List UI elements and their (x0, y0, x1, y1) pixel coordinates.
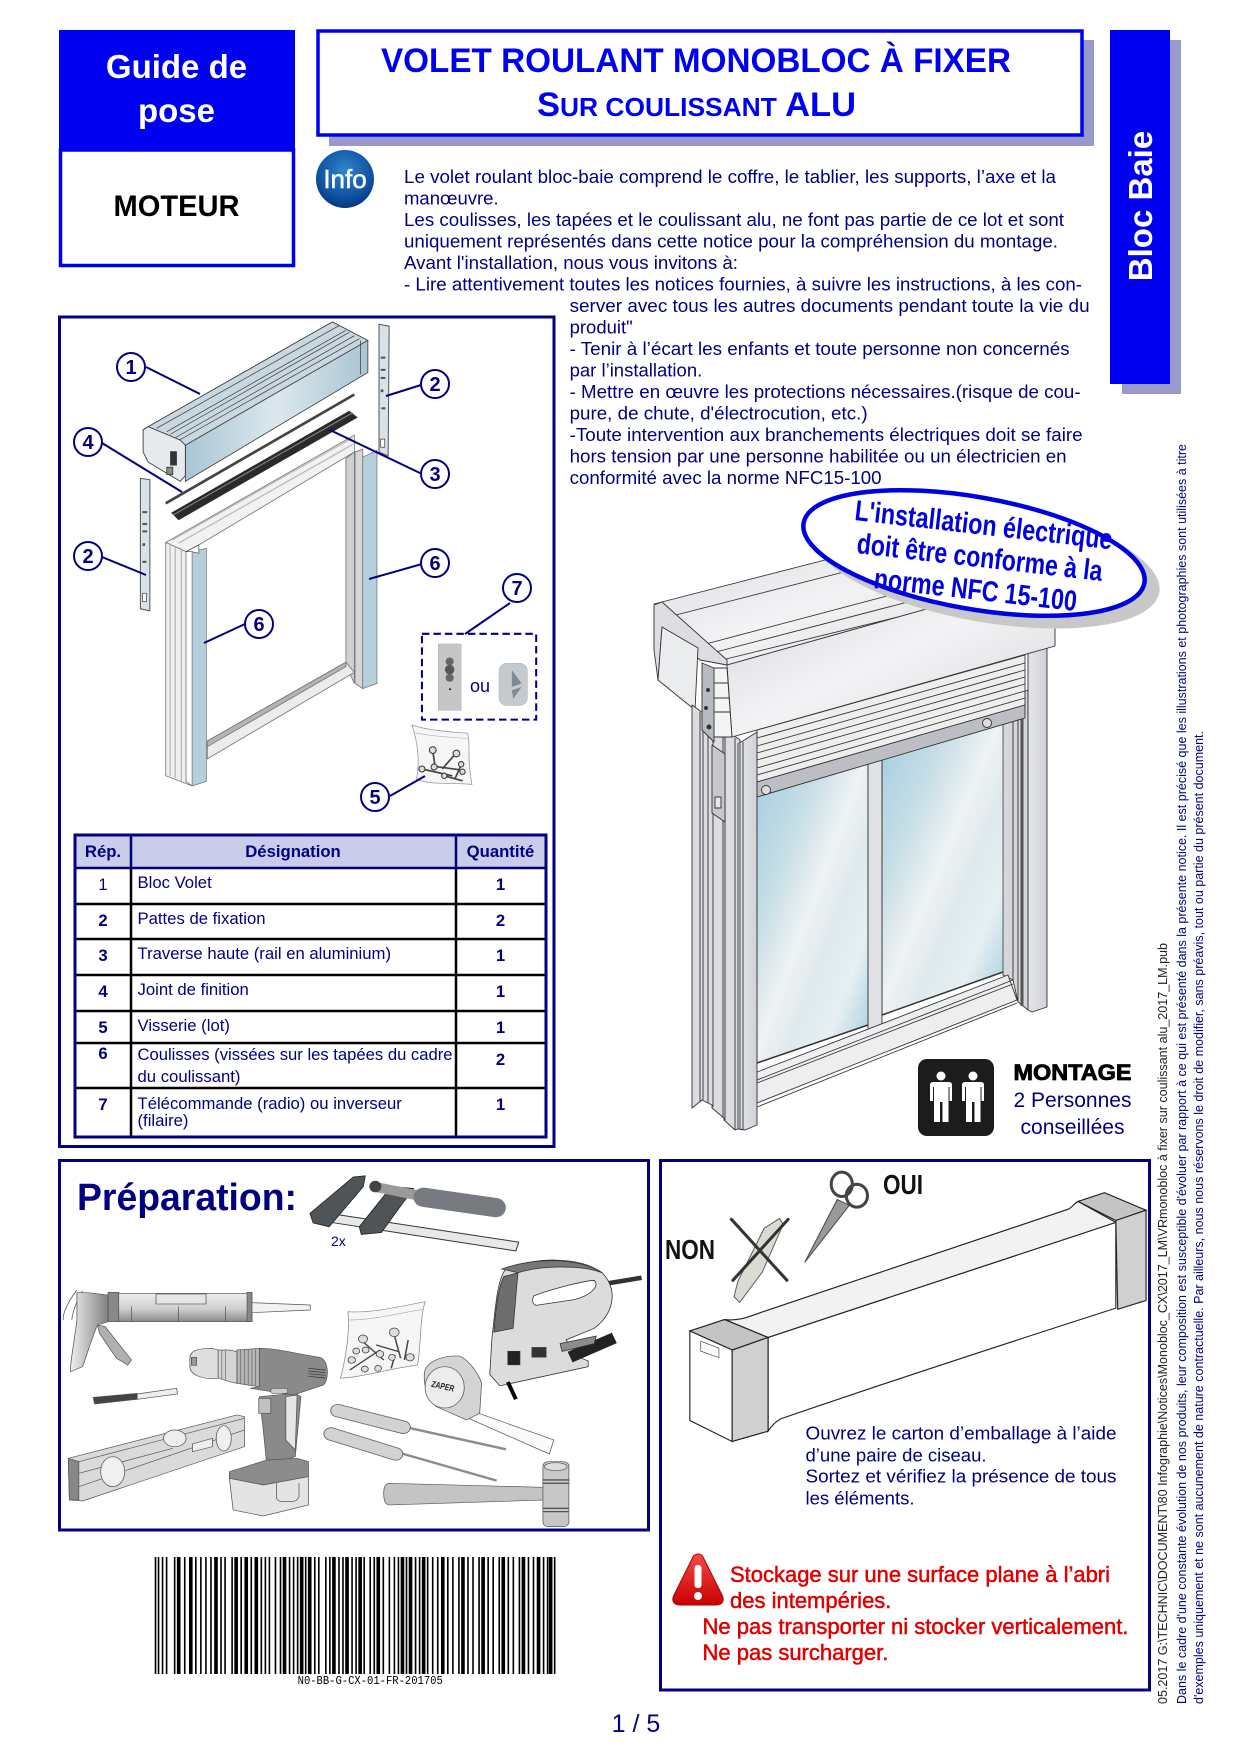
table: parts list: Quantité (467, 842, 534, 861)
pattes de fixation (140, 324, 389, 611)
table: parts list: 1 (496, 1095, 505, 1114)
text block: storage warnings: Stockage sur une surface plane à l’abri (730, 1562, 1110, 1587)
table: parts list: (filaire) (138, 1111, 188, 1130)
diagram: exploded view (140, 322, 536, 786)
text block: intro and safety instructions: server avec tous les autres documents pendant toute la vie du (570, 295, 1090, 316)
barcode (156, 1557, 555, 1688)
table: parts list: du coulissant) (138, 1067, 240, 1086)
table: parts list: 1 (496, 982, 505, 1001)
callout: electrical norm ellipse: L'installation électrique (853, 495, 1114, 556)
table: parts list: 1 (496, 1018, 505, 1037)
callout numbers: 6 (253, 614, 265, 636)
illustration: window with roller shutter (654, 515, 1055, 1130)
panel: title (318, 31, 1094, 146)
text block: opening instructions: Ouvrez le carton d’emballage à l’aide (806, 1422, 1116, 1444)
mullion (868, 758, 882, 1034)
scissors (805, 1172, 867, 1262)
label: non: NON (665, 1234, 715, 1265)
callout: electrical norm ellipse (794, 468, 1170, 652)
barcode caption: N0-BB-G-CX-01-FR-201705 (298, 1675, 443, 1688)
table: parts list: 1 (496, 946, 505, 965)
cross (731, 1219, 788, 1280)
table: parts list: 1 (98, 875, 108, 894)
heading: subtitle: SUR COULISSANT ALU (537, 86, 856, 124)
table: parts list: 2 (496, 911, 505, 930)
tablier slats (757, 655, 1025, 782)
panel: guide de pose header (59, 30, 295, 266)
brackets (713, 668, 732, 737)
text block: intro and safety instructions: -Toute intervention aux branchements électriques doit se faire (570, 424, 1083, 445)
glass panes (757, 763, 868, 1063)
callout numbers: 2 (429, 374, 441, 396)
text block: intro and safety instructions: - Tenir à l’écart les enfants et toute personne non concernés (570, 338, 1070, 359)
text block: opening instructions: Sortez et vérifiez la présence de tous (806, 1466, 1116, 1486)
cutter (734, 1219, 783, 1302)
tape measure: ZAPER (430, 1379, 456, 1394)
text block: intro and safety instructions: Avant l'installation, nous vous invitons à: (404, 252, 738, 273)
callout numbers: 5 (369, 787, 381, 809)
coffre side (654, 602, 727, 680)
text block: montage (1014, 1060, 1132, 1139)
table: parts list: 5 (98, 1018, 108, 1037)
callout numbers: 2 (82, 546, 94, 568)
joint de finition (166, 394, 354, 503)
table: parts list: Traverse haute (rail en aluminium) (138, 944, 391, 963)
label: 2x: 2x (331, 1233, 346, 1249)
illustration: upper tools (310, 1176, 642, 1399)
heading: preparation: Préparation: (77, 1177, 297, 1219)
panel: preparation tools (60, 1160, 648, 1530)
callout: electrical norm ellipse: norme NFC 15-100 (872, 563, 1079, 618)
traverse haute (171, 411, 358, 520)
hammer (384, 1462, 569, 1527)
text block: vertical legal notes: 05.2017 G:\TECHNIC\DOCUMENT\80 Infographie\Notices\Monobloc_CX\2017_LM\VRmonobloc à fixer sur coulissant alu_2017_LM.pub (1156, 943, 1170, 1704)
text block: intro and safety instructions (404, 166, 1090, 488)
drill bit (93, 1388, 177, 1404)
callout numbers: 4 (82, 432, 94, 454)
panel: bloc baie side tab: Bloc Baie (1122, 131, 1159, 281)
table: parts list: Joint de finition (138, 980, 249, 999)
text block: storage warnings: Ne pas surcharger. (702, 1640, 888, 1665)
text block: intro and safety instructions: produit" (570, 316, 633, 338)
tape measure (424, 1356, 554, 1454)
icon: two persons (918, 1059, 994, 1136)
page number: 1 / 5 (612, 1710, 660, 1738)
inverseur and remote box (422, 634, 536, 720)
table: parts list: Désignation (245, 842, 341, 861)
callout leader lines (102, 367, 510, 796)
caulking gun (63, 1290, 310, 1372)
callout numbers: 7 (511, 578, 523, 600)
screwdrivers (331, 1411, 506, 1481)
table: parts list: Pattes de fixation (138, 909, 266, 928)
table: parts list: 6 (98, 1044, 108, 1063)
callout numbers: 6 (429, 553, 441, 575)
text block: vertical legal notes (1156, 444, 1206, 1704)
text block: intro and safety instructions: par l’installation. (570, 360, 702, 380)
panel: guide de pose header: pose (138, 92, 215, 129)
table: parts list: 2 (98, 911, 108, 930)
table: parts list: Coulisses (vissées sur les tapées du cadre (138, 1045, 452, 1064)
table: parts list: 7 (98, 1095, 108, 1114)
spirit level (68, 1415, 244, 1501)
icon: info (316, 150, 374, 208)
text block: storage warnings: Ne pas transporter ni stocker verticalement. (702, 1614, 1128, 1639)
table: parts list: 2 (496, 1050, 505, 1069)
sill (757, 975, 1017, 1103)
text block: opening instructions (806, 1422, 1116, 1508)
label: ou: ou (470, 676, 490, 696)
text block: intro and safety instructions: Les coulisses, les tapées et le coulissant alu, ne font pas partie de ce lot et sont (404, 209, 1064, 230)
panel: bloc baie side tab (1110, 30, 1181, 394)
text block: intro and safety instructions: pure, de chute, d'électrocution, etc.) (570, 402, 868, 424)
text block: intro and safety instructions: uniquement représentés dans cette notice pour la compréhension du montage. (404, 230, 1058, 252)
bloc volet (143, 322, 368, 445)
cordless drill (190, 1348, 327, 1516)
coulisses (192, 548, 206, 786)
text block: vertical legal notes: Dans le cadre d'une constante évolution de nos produits, leur composition est susceptible d'évoluer par rapport à ce qui est présenté dans la présente notice. Il est précisé que les illustrations et photographies sont utilisées à titre (1175, 444, 1189, 1704)
illustration: packaging box and cutting tools (690, 1172, 1146, 1441)
text block: opening instructions: d’une paire de ciseau. (806, 1444, 987, 1466)
left jamb (738, 732, 757, 1130)
table: parts list: Visserie (lot) (138, 1016, 230, 1035)
text block: montage: MONTAGE (1014, 1060, 1132, 1085)
illustration: lower tools (63, 1290, 569, 1527)
text block: storage warnings (702, 1562, 1128, 1665)
text block: intro and safety instructions: conformité avec la norme NFC15-100 (570, 467, 882, 488)
screw bag (340, 1302, 425, 1378)
label: moteur: MOTEUR (114, 190, 240, 223)
callout: electrical norm ellipse: doit être conforme à la (855, 528, 1105, 588)
table: parts list: Bloc Volet (138, 873, 212, 892)
callout numbers: 1 (125, 357, 137, 379)
left rail (692, 705, 740, 1130)
frame (166, 435, 363, 786)
icon: info: Info (323, 164, 367, 194)
table: parts list (75, 835, 546, 1137)
callout numbers (74, 353, 531, 811)
right rails (1003, 690, 1028, 1010)
right jamb (1028, 646, 1047, 1012)
text block: montage: conseillées (1021, 1116, 1124, 1139)
text block: montage: 2 Personnes (1014, 1089, 1132, 1112)
visserie bag (412, 725, 472, 785)
label: oui: OUI (883, 1169, 923, 1200)
text block: storage warnings: des intempéries. (730, 1588, 891, 1613)
text block: intro and safety instructions: - Mettre en œuvre les protections nécessaires.(risque de cou- (570, 381, 1081, 402)
text block: vertical legal notes: d'exemples uniquement et ne sont aucunement de nature contractuelle. Par ailleurs, nous nous réservons le droit de modifier, sans préavis, tout ou partie du présent document. (1192, 731, 1206, 1704)
text block: intro and safety instructions: - Lire attentivement toutes les notices fournies, à suivre les instructions, à les con- (404, 274, 1082, 294)
coffre front (727, 573, 1055, 737)
bottom bar (757, 705, 1025, 797)
table: parts list: 1 (496, 875, 505, 894)
table: parts list: Télécommande (radio) ou inverseur (138, 1094, 402, 1113)
table: parts list: 4 (98, 982, 108, 1001)
panel: components diagram and table (60, 317, 554, 1146)
table: parts list: Rép. (85, 842, 121, 861)
text block: intro and safety instructions: manœuvre. (404, 188, 499, 208)
carton (690, 1193, 1146, 1441)
heading: main title: VOLET ROULANT MONOBLOC À FIXER (381, 42, 1011, 80)
coffre top (654, 515, 1055, 665)
table: parts list: 3 (98, 946, 108, 965)
text block: intro and safety instructions: hors tension par une personne habilitée ou un électricien en (570, 446, 1067, 466)
panel: unpacking and storage (660, 1160, 1150, 1690)
text block: opening instructions: les éléments. (806, 1488, 914, 1508)
text block: intro and safety instructions: Le volet roulant bloc-baie comprend le coffre, le tablier, les supports, l’axe et la (404, 166, 1057, 187)
heading: guide de pose: Guide de (106, 48, 247, 85)
clamp (310, 1176, 519, 1251)
callout numbers: 3 (429, 464, 441, 486)
jigsaw (490, 1260, 642, 1399)
icon: warning triangle (673, 1554, 723, 1605)
